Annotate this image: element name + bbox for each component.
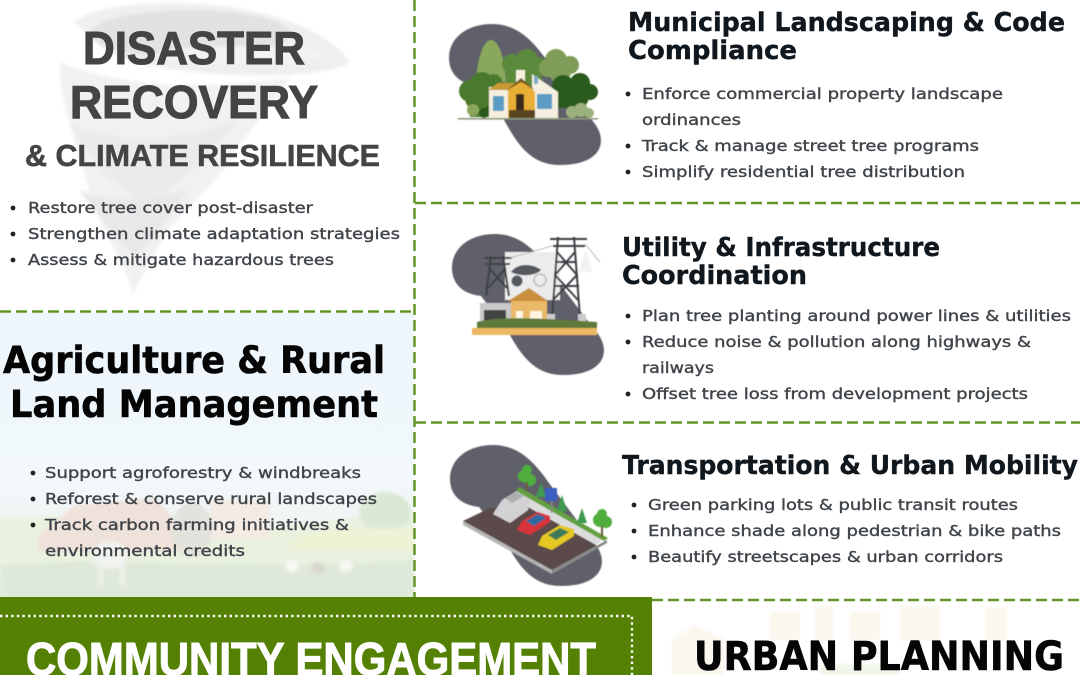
- heading: compliance: Compliance: [628, 36, 797, 66]
- panel background: [0, 597, 652, 675]
- list: transportation bullets: [632, 496, 1061, 566]
- panel: transportation: [450, 445, 1078, 586]
- list: transportation bullets: Enhance shade along pedestrian & bike paths: [648, 522, 1061, 540]
- panel: utility coordination: [452, 233, 1071, 403]
- list: agriculture bullets: [31, 464, 377, 560]
- list: utility bullets: railways: [642, 359, 714, 377]
- illustration: faded farm landscape: [0, 492, 414, 597]
- list: municipal bullets: Track & manage street tree programs: [641, 137, 979, 155]
- list: municipal bullets: Enforce commercial property landscape: [642, 85, 1003, 103]
- panel: municipal landscaping: [449, 8, 1065, 181]
- list: agriculture bullets: Support agroforestry & windbreaks: [45, 464, 361, 482]
- icon: house with trees: [449, 24, 601, 165]
- list: transportation bullets: Beautify streetscapes & urban corridors: [648, 548, 1003, 566]
- heading: climate resilience: & CLIMATE RESILIENCE: [25, 138, 380, 173]
- heading: land management: Land Management: [10, 383, 378, 426]
- panel background: [0, 313, 414, 597]
- heading: municipal landscaping: Municipal Landscaping & Code: [628, 8, 1065, 38]
- icon: parking lot: [450, 445, 612, 586]
- list: transportation bullets: Green parking lots & public transit routes: [648, 496, 1018, 514]
- panel: urban planning: [672, 606, 1064, 675]
- panel: community engagement: [0, 597, 652, 675]
- list: agriculture bullets: Track carbon farming initiatives &: [44, 516, 349, 534]
- list: municipal bullets: Simplify residential tree distribution: [642, 163, 965, 181]
- list: utility bullets: Reduce noise & pollution along highways &: [642, 333, 1031, 351]
- heading: disaster: DISASTER: [83, 22, 305, 74]
- heading: coordination: Coordination: [622, 261, 807, 291]
- list: agriculture bullets: Reforest & conserve rural landscapes: [45, 490, 377, 508]
- illustration: faded city map: [672, 606, 1007, 675]
- list: utility bullets: [626, 307, 1071, 403]
- list: disaster bullets: Restore tree cover post-disaster: [28, 199, 314, 217]
- list: agriculture bullets: environmental credits: [45, 542, 245, 560]
- list: municipal bullets: ordinances: [642, 111, 741, 129]
- icon: tornado watermark: [60, 3, 350, 296]
- heading: agriculture and rural: Agriculture & Rural: [3, 339, 385, 382]
- heading: utility: Utility & Infrastructure: [622, 233, 940, 263]
- icon: power lines and house: [452, 234, 604, 375]
- panel: agriculture and rural land management: [0, 313, 414, 597]
- dotted inner frame: [0, 616, 632, 675]
- list: disaster bullets: Strengthen climate adaptation strategies: [28, 225, 400, 243]
- list: utility bullets: Plan tree planting around power lines & utilities: [642, 307, 1071, 325]
- list: utility bullets: Offset tree loss from development projects: [642, 385, 1028, 403]
- list: disaster bullets: [11, 199, 400, 269]
- panel: disaster recovery: [11, 3, 400, 296]
- list: municipal bullets: [626, 85, 1003, 181]
- heading: recovery: RECOVERY: [70, 76, 318, 128]
- list: disaster bullets: Assess & mitigate hazardous trees: [28, 251, 334, 269]
